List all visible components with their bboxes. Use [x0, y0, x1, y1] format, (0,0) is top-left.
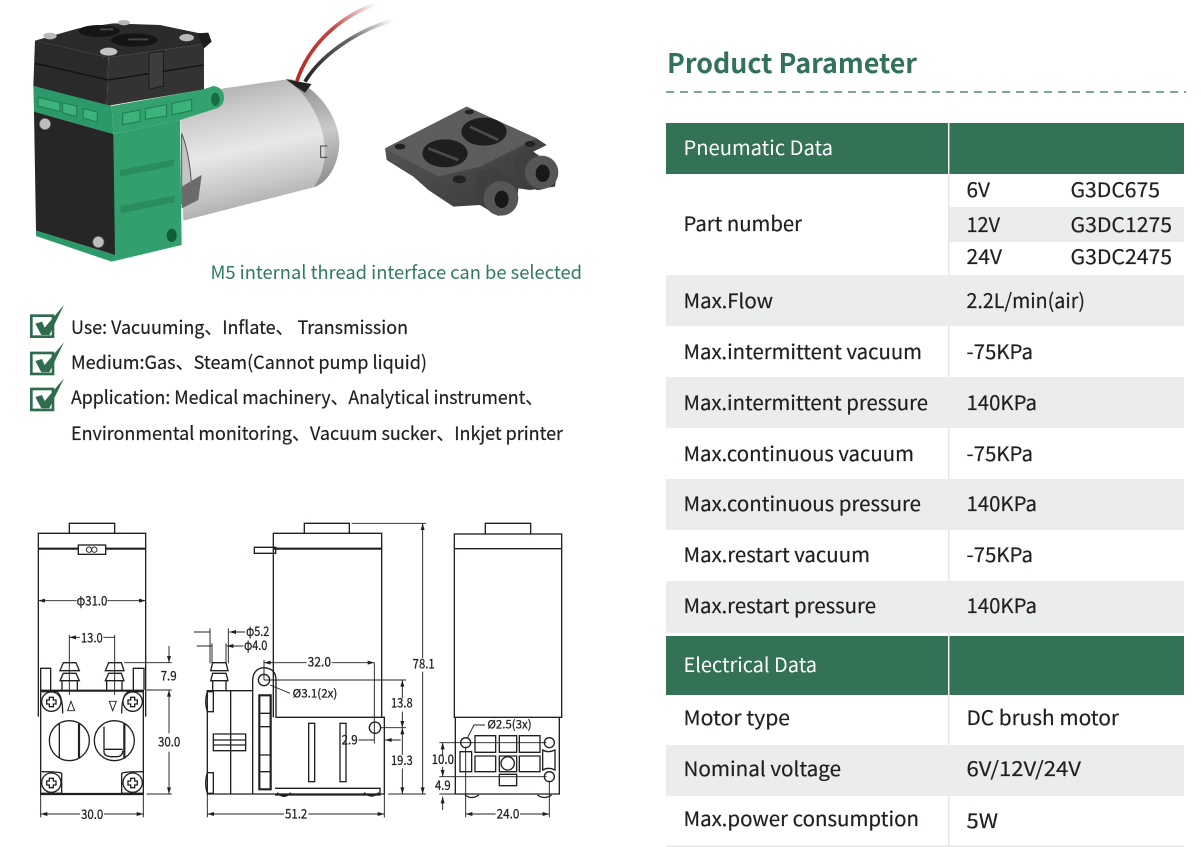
drawing: front view: [38, 523, 180, 823]
row: part number: G3DC675: [1070, 174, 1160, 203]
header: pneumatic data: [666, 123, 1184, 174]
row: max power: Max.power consumption: [684, 803, 919, 832]
row: continuous vacuum: -75KPa: [966, 438, 1033, 467]
row: part number: [684, 174, 1184, 270]
dimension 13.8: 13.8: [391, 693, 413, 712]
row: restart pressure: [666, 581, 1184, 633]
row: max power: [684, 803, 998, 834]
row: restart vacuum: -75KPa: [966, 539, 1033, 568]
row: max flow: [666, 275, 1184, 326]
dimension 78.1: 78.1: [413, 653, 435, 672]
dimension 30.0 horizontal: 30.0: [81, 804, 103, 823]
row: restart pressure: 140KPa: [966, 590, 1037, 619]
header: pneumatic data: Pneumatic Data: [684, 132, 833, 161]
application text: Application: Medical machinery、Analytical instrument、: [71, 384, 543, 410]
dimension 4.9: 4.9: [435, 775, 451, 794]
dimension 32.0: 32.0: [308, 652, 331, 671]
dimension 4.0: φ4.0: [244, 635, 267, 654]
dimension 5.2: φ5.2: [246, 621, 269, 640]
row: nominal voltage: Nominal voltage: [684, 753, 841, 782]
dimension hole 2.5: Ø2.5(3x): [487, 715, 532, 732]
application text continued: Environmental monitoring、Vacuum sucker、Inkjet printer: [71, 420, 564, 446]
row: motor type: [684, 702, 1119, 731]
feature list: [31, 305, 564, 446]
row: intermittent pressure: Max.intermittent pressure: [684, 387, 928, 416]
dimension 13.0: 13.0: [81, 627, 103, 646]
row: continuous pressure: [666, 479, 1184, 530]
title: Product Parameter: [667, 42, 917, 81]
dimension 19.3: 19.3: [391, 750, 413, 769]
dimension 10.0: 10.0: [432, 749, 454, 768]
dimension 2.9: 2.9: [342, 729, 358, 748]
icon: check box 1: [31, 305, 64, 337]
row: motor type: Motor type: [684, 702, 790, 731]
drawing: end view: [432, 523, 562, 822]
row: nominal voltage: [666, 745, 1184, 796]
photo: diaphragm pump with green housing and silver motor: [33, 4, 393, 262]
dimension 31.0: φ31.0: [77, 591, 107, 610]
dimension 30.0 vertical: 30.0: [158, 732, 180, 751]
row: continuous pressure: 140KPa: [966, 488, 1037, 517]
row: part number: G3DC2475: [1070, 241, 1172, 270]
dimension 7.9: 7.9: [161, 666, 177, 685]
row: intermittent vacuum: Max.intermittent vacuum: [684, 336, 922, 365]
row: part number: 24V: [966, 241, 1003, 270]
row: continuous pressure: Max.continuous pressure: [684, 488, 921, 517]
row: part number: 6V: [966, 174, 991, 203]
photo: M5 threaded interface part: [385, 107, 558, 216]
row: intermittent vacuum: -75KPa: [966, 336, 1033, 365]
row: continuous vacuum: Max.continuous vacuum: [684, 438, 914, 467]
header: electrical data: [666, 636, 1184, 695]
row: max flow: Max.Flow: [684, 285, 773, 314]
row: intermittent pressure: [666, 377, 1184, 428]
row: restart vacuum: [684, 539, 1033, 568]
row: restart vacuum: Max.restart vacuum: [684, 539, 870, 568]
parameter table: [666, 123, 1184, 847]
row: motor type: DC brush motor: [966, 702, 1119, 731]
medium text: Medium:Gas、Steam(Cannot pump liquid): [71, 349, 427, 375]
row: part number: 12V: [966, 209, 1000, 238]
icon: check box 3: [31, 378, 64, 410]
row: intermittent vacuum: [684, 336, 1033, 365]
icon: check box 2: [31, 342, 64, 374]
dimension 51.2: 51.2: [285, 803, 307, 822]
row: continuous vacuum: [684, 438, 1033, 467]
dimension 24.0: 24.0: [497, 803, 519, 822]
row: max flow: 2.2L/min(air): [966, 285, 1085, 314]
row: max power: 5W: [966, 805, 998, 834]
use text: Use: Vacuuming、Inflate、 Transmission: [71, 314, 408, 340]
row: intermittent pressure: 140KPa: [966, 387, 1037, 416]
row: part number: G3DC1275: [1070, 209, 1172, 238]
dimension hole 3.1: Ø3.1(2x): [293, 684, 337, 701]
drawing: side view: [194, 523, 435, 822]
caption: M5 internal thread interface can be selected: [210, 259, 582, 285]
row: restart pressure: Max.restart pressure: [684, 590, 876, 619]
header: electrical data: Electrical Data: [684, 649, 817, 678]
row: nominal voltage: 6V/12V/24V: [966, 753, 1082, 782]
row: part number: Part number: [684, 208, 802, 237]
